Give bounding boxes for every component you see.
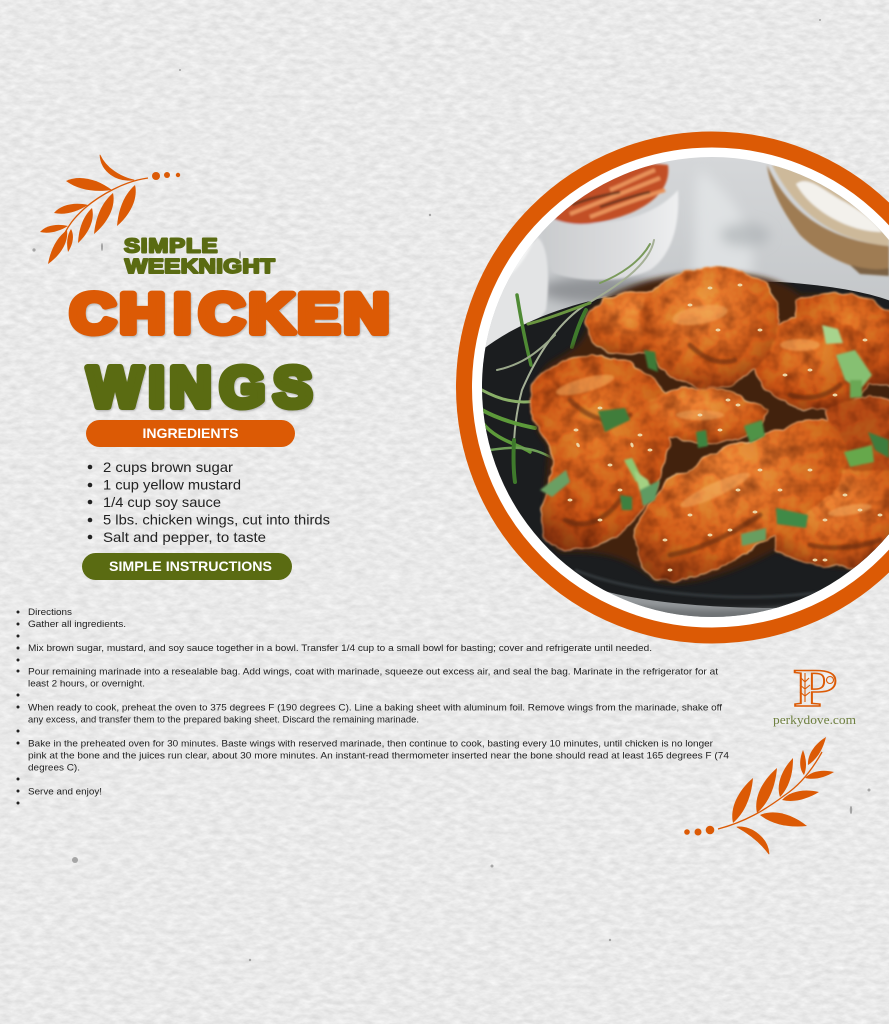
directions list: Pour remaining marinade into a resealable bag. Add wings, coat with marinade, squeeze out excess air, and seal the bag. Marinate in the refrigerator for at bbox=[28, 666, 718, 676]
green onion garnish bbox=[540, 325, 889, 546]
title line: wings: WINGS bbox=[88, 356, 312, 419]
title line: simple: SIMPLE bbox=[124, 234, 218, 257]
ingredients list: Salt and pepper, to taste bbox=[103, 529, 266, 545]
directions list: any excess, and transfer them to the prepared baking sheet. Discard the remaining marinade. bbox=[28, 714, 419, 724]
sesame seeds bbox=[568, 284, 882, 572]
logo ornament bbox=[800, 673, 834, 702]
directions list: Bake in the preheated oven for 30 minutes. Baste wings with reserved marinade, then continue to cook, basting every 10 minutes, until chicken is no longer bbox=[28, 738, 713, 748]
ingredients list: 1/4 cup soy sauce bbox=[103, 494, 221, 510]
ingredients list: 1 cup yellow mustard bbox=[103, 476, 241, 492]
ingredients list: 2 cups brown sugar bbox=[103, 459, 233, 475]
rosemary sprig bbox=[482, 240, 654, 482]
directions list: Gather all ingredients. bbox=[28, 619, 126, 629]
glaze shadows bbox=[565, 345, 880, 555]
wing shadow base bbox=[533, 272, 889, 583]
directions list: Mix brown sugar, mustard, and soy sauce together in a bowl. Transfer 1/4 cup to a small bowl for basting; cover and refrigerate until needed. bbox=[28, 643, 652, 653]
ingredients list: 5 lbs. chicken wings, cut into thirds bbox=[103, 512, 330, 528]
directions list: When ready to cook, preheat the oven to 375 degrees F (190 degrees C). Line a baking sheet with aluminum foil. Remove wings from the marinade, shake off bbox=[28, 702, 722, 712]
directions list bbox=[16, 607, 729, 804]
title bbox=[70, 234, 389, 419]
directions list: degrees C). bbox=[28, 762, 80, 772]
sprig: top left bbox=[39, 155, 180, 267]
directions list: least 2 hours, or overnight. bbox=[28, 678, 145, 688]
ingredients heading pill bbox=[86, 420, 295, 447]
instructions heading pill: SIMPLE INSTRUCTIONS bbox=[109, 558, 272, 574]
title line: chicken: CHICKEN bbox=[70, 282, 389, 345]
food photo in circular frame bbox=[464, 140, 889, 636]
ingredients heading pill: INGREDIENTS bbox=[142, 425, 238, 441]
website name: perkydove.com bbox=[773, 713, 856, 727]
instructions heading pill bbox=[82, 553, 292, 580]
ingredients list bbox=[88, 459, 330, 545]
title line: weeknight: WEEKNIGHT bbox=[125, 255, 275, 278]
wing pieces bbox=[530, 268, 889, 581]
logo letter P: P bbox=[794, 658, 838, 718]
sprig: bottom right bbox=[684, 735, 835, 854]
directions list: Directions bbox=[28, 607, 72, 617]
directions list: Serve and enjoy! bbox=[28, 786, 102, 796]
photo: chicken wings on black plate bbox=[480, 150, 889, 630]
glaze highlights bbox=[554, 301, 873, 519]
directions list: pink at the bone and the juices run clear, about 30 more minutes. An instant-read thermometer inserted near the bone should read at least 165 degrees F (74 bbox=[28, 750, 729, 760]
orange ring bbox=[464, 140, 889, 636]
brand logo bbox=[773, 658, 856, 727]
